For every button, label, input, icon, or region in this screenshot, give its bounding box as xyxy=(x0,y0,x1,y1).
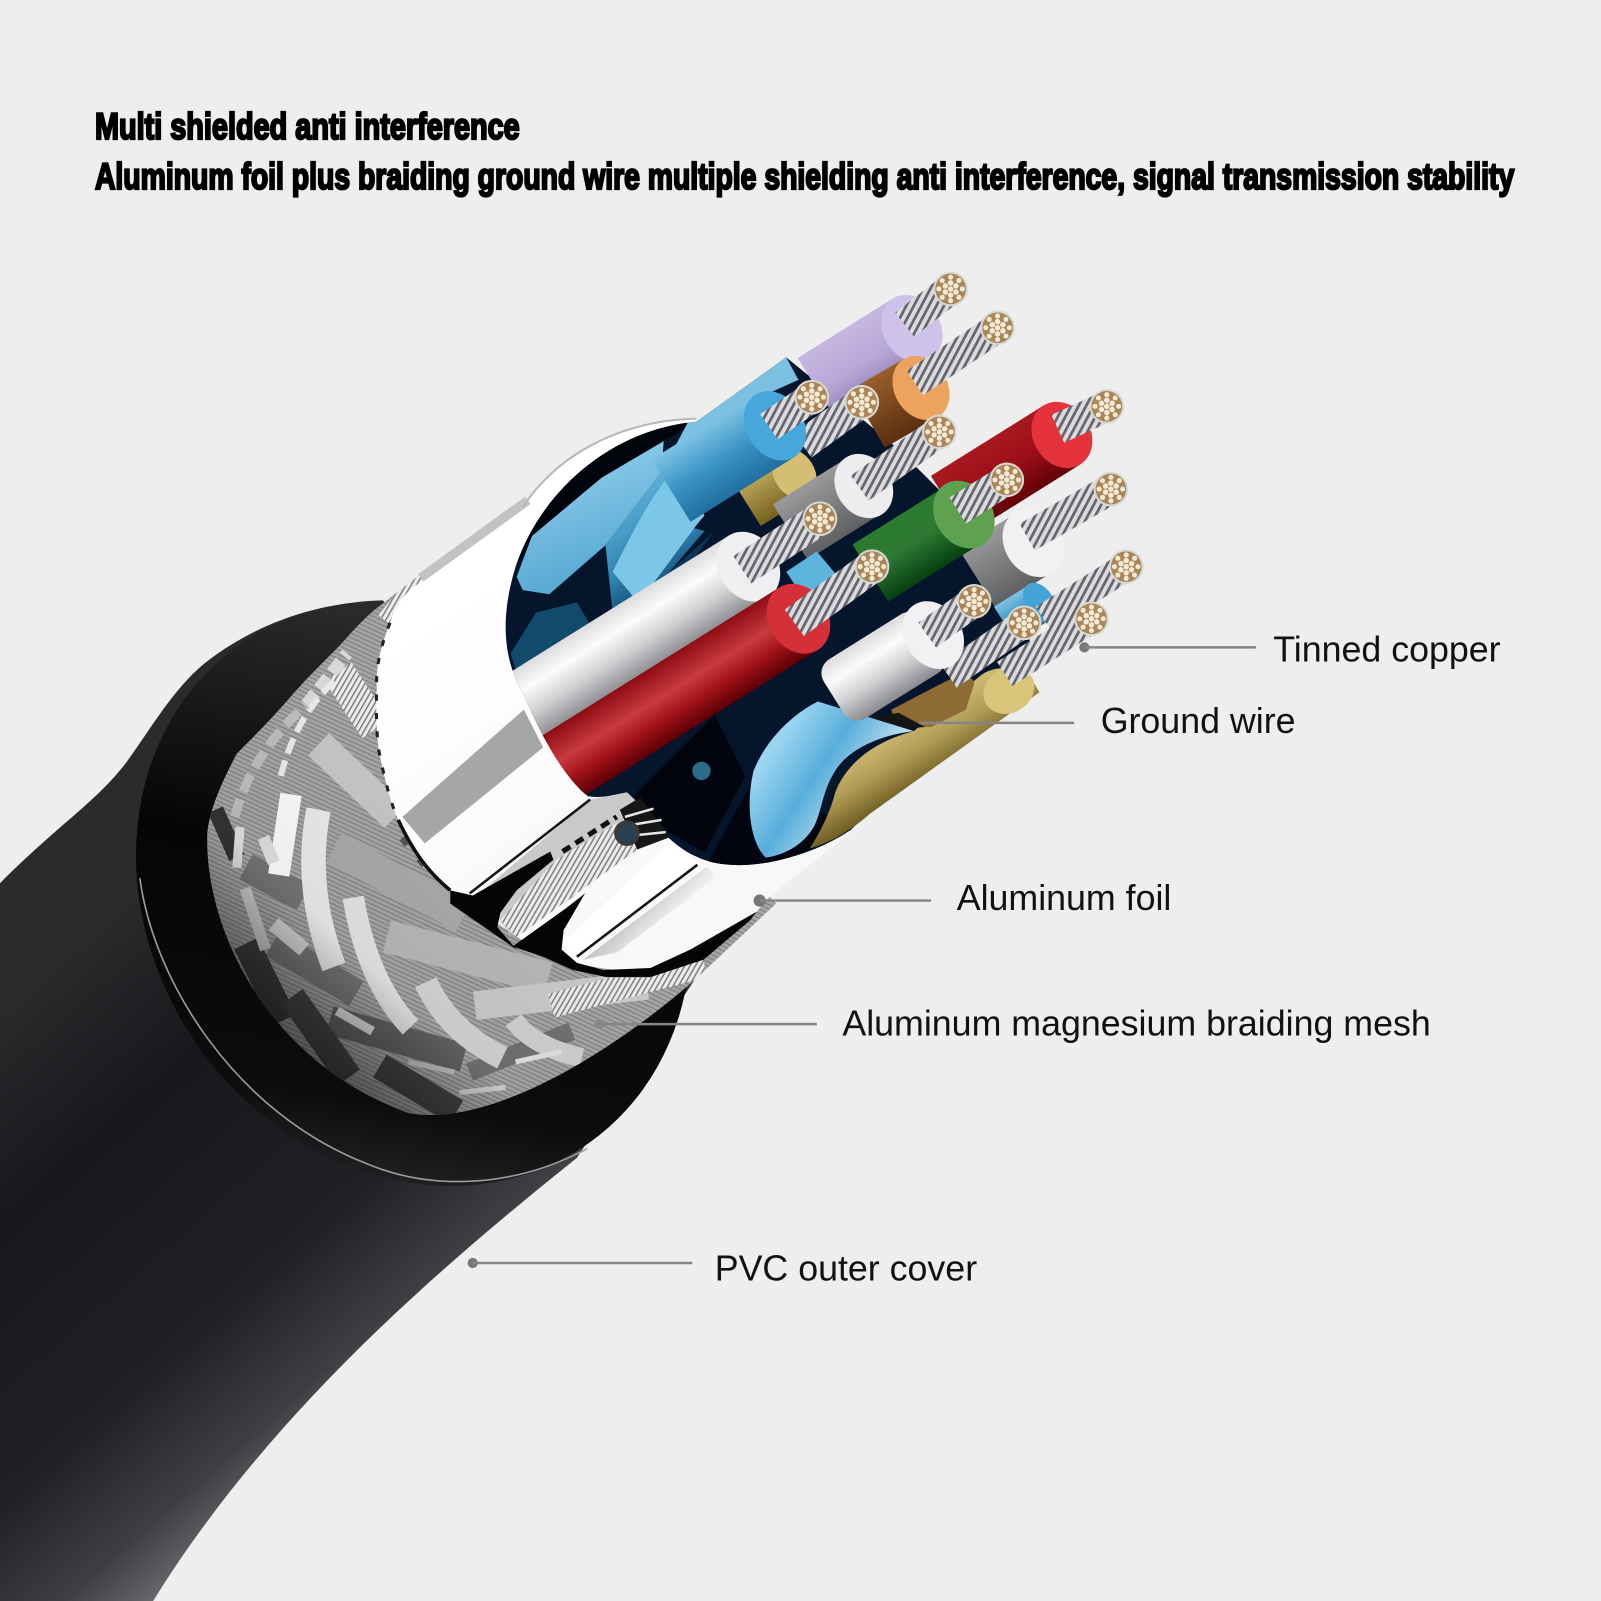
black patch upper xyxy=(450,852,553,950)
wire: white back xyxy=(772,415,957,561)
callout: tinned copper xyxy=(1079,630,1501,670)
foil dark edge line xyxy=(470,799,590,893)
callout: tinned copper: Tinned copper xyxy=(1273,630,1501,670)
callout: aluminum foil: Aluminum foil xyxy=(957,878,1171,918)
cable illustration xyxy=(0,272,1144,1601)
title: Multi shielded anti interference xyxy=(95,106,520,147)
aluminum magnesium braiding mesh xyxy=(194,541,786,1133)
wire: white lower xyxy=(815,584,991,728)
callout: PVC outer cover xyxy=(468,1248,977,1288)
shield drain dot xyxy=(616,822,638,844)
black line xyxy=(577,865,697,957)
wire: white big xyxy=(495,501,837,744)
grey foil strip xyxy=(583,867,717,960)
PVC outer cover body xyxy=(0,600,694,1601)
wire: purple xyxy=(798,272,968,419)
wire: small blue behind xyxy=(786,551,842,602)
wire: blue main xyxy=(613,379,829,602)
open cable core xyxy=(495,272,1144,868)
callout: PVC outer cover: PVC outer cover xyxy=(715,1248,977,1288)
aluminum foil xyxy=(376,419,851,971)
callout: braiding mesh: Aluminum magnesium braiding mesh xyxy=(842,1003,1431,1043)
wires xyxy=(495,272,1144,858)
strands hatch xyxy=(500,823,637,937)
foil grey reflection band xyxy=(402,710,543,843)
zebra stripes xyxy=(620,797,670,850)
white strip xyxy=(562,843,697,957)
foil rim edge xyxy=(523,419,696,507)
wire: grey right xyxy=(958,472,1128,609)
foil braid-side edge xyxy=(376,623,398,820)
wire: bare strand lower A xyxy=(1044,549,1144,619)
exposed shield strands under foil xyxy=(450,792,757,977)
dashes xyxy=(563,817,617,852)
wire: bronze small xyxy=(891,677,974,727)
lower blue foil reflection xyxy=(750,701,914,858)
callout: ground wire: Ground wire xyxy=(1101,701,1295,741)
wire: bare ground strand xyxy=(803,385,879,445)
foil top edge strip xyxy=(421,500,528,578)
wire: orange xyxy=(851,310,1015,448)
wire: red big xyxy=(528,549,889,807)
PVC cut face disc xyxy=(136,638,686,1186)
wire: small gold xyxy=(733,440,826,526)
wire: red back xyxy=(931,389,1124,535)
inner blue foil reflection xyxy=(676,358,798,444)
wire: green xyxy=(851,463,1024,603)
wire: small blue lower xyxy=(993,577,1063,642)
callout: aluminum foil xyxy=(754,878,1171,918)
black patch lower and foil bottom edge xyxy=(513,893,757,977)
grey strip under foil edge xyxy=(478,792,653,934)
foil dark corner edge xyxy=(398,820,450,890)
black rim crescent xyxy=(516,422,696,567)
wire: bare strand lower B xyxy=(1005,601,1109,674)
ground wire wedge xyxy=(860,713,925,731)
wire: gold long xyxy=(810,657,1043,848)
wire: bare strand lower C xyxy=(949,605,1041,676)
